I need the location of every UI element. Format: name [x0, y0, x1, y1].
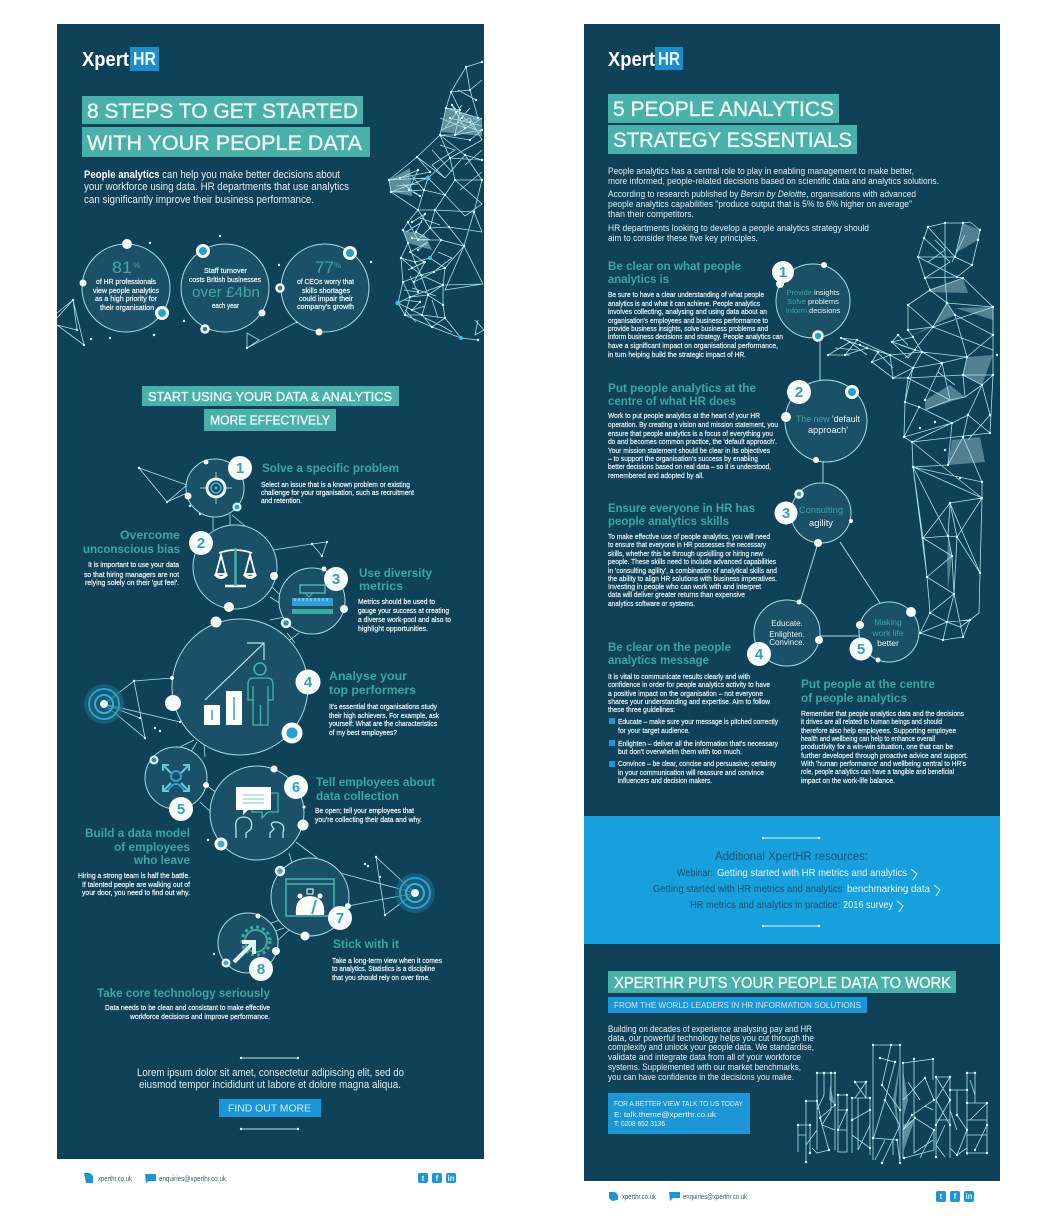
principle 1: Inform decisions: [786, 306, 841, 315]
logo: XpertHR left: Xpert: [82, 49, 129, 71]
section 2 text: remembered and adopted by all.: [608, 471, 704, 480]
section 1 text: in turn helping build the strategic impact of HR.: [608, 350, 746, 359]
principle 5: better: [877, 638, 899, 648]
section 4 text: but don't overwhelm them with too much.: [618, 747, 742, 756]
network: city skyline: [798, 1045, 987, 1163]
footer: left: in: [447, 1174, 455, 1183]
stat: over £4bn: costs British businesses: [189, 275, 261, 284]
panel: 8 steps: [57, 24, 484, 1159]
step 5: your door, you need to find out why.: [82, 888, 190, 897]
section 3 text: Ensure everyone in HR has: [608, 501, 755, 515]
principle 2: [781, 380, 867, 463]
contact box: E: talk.theme@xperthr.co.uk: [614, 1112, 717, 1119]
contact box: T: 0208 652 3136: [614, 1121, 665, 1128]
title: 8 steps: 8 STEPS TO GET STARTED: [87, 99, 358, 123]
heading: start using your data: MORE EFFECTIVELY: [210, 412, 330, 428]
logo: XpertHR right: HR: [658, 49, 680, 69]
step 2: [83, 525, 278, 612]
step 4: of my best employees?: [329, 728, 397, 737]
section 4 text: a positive impact on the organisation – not everyone: [608, 689, 763, 698]
stat: 77%: 77: [315, 258, 334, 277]
footer: right: f: [954, 1192, 957, 1201]
footer: left: t: [422, 1174, 425, 1183]
network: stats decoration: [57, 236, 371, 348]
section 1 text: organisation's employees and business performance to: [608, 316, 768, 325]
intro text: aim to consider these five key principles.: [608, 233, 758, 243]
stat: 81%: %: [133, 261, 140, 270]
footer: right: xperthr.co.uk: [622, 1194, 656, 1201]
icon: dashboard: [286, 879, 334, 916]
section 4 text: Enlighten – deliver all the information that's necessary: [618, 739, 778, 748]
contact box: FOR A BETTER VIEW TALK TO US TODAY: [614, 1099, 743, 1108]
icon: target left: [84, 684, 124, 724]
section 3 text: [608, 501, 777, 608]
step 4: Analyse your: [329, 669, 407, 683]
section 1 text: analytics is: [608, 272, 669, 286]
stat: 77%: company's growth: [297, 302, 354, 311]
section 2 text: [608, 381, 778, 480]
section 1 text: inform business decisions and strategy. People analytics can: [608, 332, 783, 341]
panel: additional resources: 2016 survey: [843, 899, 894, 911]
step 6: Be open; tell your employees that: [315, 806, 414, 815]
section 2 text: better decisions based on real data – so it is understood,: [608, 462, 771, 471]
step 5: If talented people are walking out of: [82, 880, 190, 889]
panel: additional resources: Additional XpertHR resources:: [715, 851, 868, 863]
footer: left: enquiries@xperthr.co.uk: [159, 1176, 226, 1183]
step 1: challenge for your organisation, such as recruitment: [261, 488, 414, 497]
principle 3: [774, 483, 853, 547]
logo: XpertHR left: HR: [133, 49, 156, 69]
footer: left: f: [436, 1174, 439, 1183]
section 3 text: the ability to align HR solutions with business imperatives.: [608, 574, 777, 583]
section 3 text: people. These skills need to include advanced capabilities: [608, 557, 776, 566]
stat: 81%: view people analytics: [93, 286, 159, 295]
icon: technology gear and arrow: [234, 927, 270, 962]
step 6: you're collecting their data and why.: [315, 815, 422, 824]
principle 2: The new 'default: [796, 414, 860, 425]
heading: start using your data: START USING YOUR DATA & ANALYTICS: [148, 389, 392, 404]
section 4 text: shares your understanding and expertise. Aim to follow: [608, 697, 771, 706]
section 1 text: [608, 259, 783, 359]
body: XpertHR: complexity and unlock your people data. We standardise,: [608, 1042, 814, 1052]
section 4 text: analytics message: [608, 653, 709, 667]
connector: principle links: [800, 342, 880, 636]
step 7: to analytics. Statistics is a discipline: [332, 964, 435, 973]
step 1: and retention.: [261, 496, 302, 505]
stat: 77%: could impair their: [299, 294, 354, 303]
step 3: Metrics should be used to: [358, 597, 435, 606]
step 3: metrics: [359, 579, 403, 593]
intro text: HR departments looking to develop a people analytics strategy should: [608, 223, 869, 233]
section 5 text: it drives are all related to human beings and should: [801, 717, 942, 726]
call to action: FIND OUT MORE: [228, 1102, 311, 1114]
section 1 text: have a significant impact on organisational performance,: [608, 341, 778, 350]
principle 5: work life: [871, 628, 904, 638]
section 2 text: do and becomes common practice, the 'default approach'.: [608, 437, 777, 446]
body: XpertHR: data, our powerful technology helps you cut through the: [608, 1033, 814, 1043]
step 2: Overcome: [120, 528, 180, 542]
section 1 text: analytics is and what it can achieve. People analytics: [608, 299, 760, 308]
section 1 text: Be sure to have a clear understanding of what people: [608, 290, 764, 299]
contact box: [608, 1093, 750, 1134]
stat: 81%: as a high priority for: [95, 294, 158, 303]
step 2: relying solely on their 'gut feel'.: [85, 578, 179, 587]
step 5: 5: [177, 801, 185, 818]
step 3: Use diversity: [359, 566, 432, 580]
step 4: [165, 616, 439, 755]
footer: left: xperthr.co.uk: [98, 1176, 132, 1183]
section 2 text: – to support the organisation's success by enabling: [608, 454, 758, 463]
step 4: their high achievers. For example, ask: [329, 711, 439, 720]
section 5 text: health and wellbeing can help to enhance overall: [801, 734, 935, 743]
section 3 text: to ensure that everyone in HR possesses the necessary: [608, 540, 766, 549]
step 1: 1: [236, 460, 244, 477]
icon: metrics: [292, 585, 333, 614]
stat: 81%: 81: [112, 258, 132, 277]
icon: data model: [163, 765, 189, 791]
principle 1: 1: [779, 264, 787, 281]
section 5 text: Put people at the centre: [801, 677, 935, 691]
step 8: Take core technology seriously: [97, 986, 270, 1000]
section 3 text: To make effective use of people analytics, you will need: [608, 532, 770, 541]
panel: additional resources: Webinar:: [677, 867, 713, 879]
step 2: so that hiring managers are not: [84, 570, 179, 579]
title: 8 steps: [82, 96, 370, 157]
section 4 text: these three guidelines:: [608, 705, 675, 714]
stat: 77%: %: [334, 261, 341, 270]
body: XpertHR: systems. Supplemented with our market benchmarks,: [608, 1062, 801, 1072]
principle 4: Enlighten.: [769, 630, 805, 639]
stat: over £4bn: Staff turnover: [204, 266, 248, 275]
step 1: [184, 456, 414, 517]
network: human figure: [828, 222, 997, 640]
principle 4: Convince.: [769, 638, 805, 647]
heading: XpertHR puts your people data to work: [608, 971, 956, 1013]
step 8: [97, 913, 280, 1021]
stat: 81%: their organisation: [100, 303, 154, 312]
footer: right: in: [965, 1192, 973, 1201]
intro text: than their competitors.: [608, 209, 694, 219]
section 4 text: Be clear on the people: [608, 640, 731, 654]
section 5 text: therefore also help employees. Supporting employee: [801, 726, 956, 735]
section 5 text: [801, 677, 968, 785]
icon: conversation: [236, 787, 284, 838]
step 3: a diverse work-pool and also to: [358, 615, 451, 624]
principle 5: [850, 602, 919, 662]
intro text: According to research published by Bersin by Deloitte, organisations with advanced: [608, 189, 916, 199]
section 4 text: confidence in order for people analytics activity to have: [608, 680, 770, 689]
section 3 text: data will deliver greater returns than expensive: [608, 590, 745, 599]
stat: over £4bn: over £4bn: [192, 284, 260, 301]
section 4 text: [608, 640, 778, 785]
step 2: 2: [197, 535, 205, 552]
footer: right: enquiries@xperthr.co.uk: [683, 1194, 747, 1201]
section 3 text: analytics software or systems.: [608, 599, 695, 608]
intro text: People analytics has a central role to play in enabling management to make better,: [608, 166, 914, 176]
step 3: 3: [332, 571, 340, 588]
heading: XpertHR puts your people data to work: FROM THE WORLD LEADERS IN HR INFORMATION SOLUTIONS: [614, 1000, 861, 1010]
stat: 81%: of HR professionals: [96, 277, 156, 286]
step 3: gauge your success at creating: [358, 606, 449, 615]
step 4: yourself: What are the characteristics: [329, 719, 437, 728]
call to action: [137, 1058, 404, 1129]
section 5 text: further developed through proactive advice and support.: [801, 751, 968, 760]
section 4 text: Convince – be clear, concise and persuasive; certainty: [618, 759, 776, 768]
panel: additional resources: Getting started with HR metrics and analytics: [717, 867, 907, 879]
stat: over £4bn: each year: [212, 301, 240, 310]
principle 3: Consulting: [799, 505, 843, 516]
call to action: Lorem ipsum dolor sit amet, consectetur adipiscing elit, sed do: [137, 1067, 404, 1079]
body: XpertHR: you can have confidence in the decisions you make.: [608, 1072, 794, 1082]
heading: start using your data: [142, 386, 399, 431]
principle 2: approach': [808, 425, 848, 436]
step 8: Data needs to be clean and consistant to make effective: [105, 1003, 270, 1012]
panel: additional resources: [584, 816, 1000, 944]
icon: scales: [215, 548, 256, 586]
principle 3: agility: [809, 518, 833, 529]
icon: performance chart: [204, 643, 273, 725]
section 5 text: productivity for a win-win situation, one that can be: [801, 742, 953, 751]
principle 2: 2: [795, 384, 803, 401]
intro text: people analytics capabilities "produce output that is 5% to 6% higher on average": [608, 199, 912, 209]
call to action: eiusmod tempor incididunt ut labore et dolore magna aliqua.: [139, 1079, 401, 1091]
step 7: that you should rely on over time.: [332, 973, 430, 982]
section 1 text: involves collecting, analysing and using data about an: [608, 307, 767, 316]
intro text: your workforce using data. HR departments that use analytics: [84, 181, 349, 193]
body: XpertHR: Building on decades of experience analysing pay and HR: [608, 1024, 812, 1034]
intro text: can significantly improve their business performance.: [84, 194, 314, 206]
panel: additional resources: HR metrics and analytics in practice:: [690, 899, 840, 911]
footer: right: [609, 1191, 974, 1202]
panel: additional resources: Getting started with HR metrics and analytics:: [653, 883, 845, 895]
panel: 5 essentials: [584, 24, 1000, 1181]
intro text: People analytics can help you make better decisions about: [84, 169, 340, 181]
section 4 text: It is vital to communicate results clearly and with: [608, 672, 750, 681]
step 6: data collection: [316, 789, 399, 803]
logo: XpertHR right: [608, 47, 683, 71]
footer: left: [84, 1173, 456, 1183]
panel: additional resources: benchmarking data: [847, 883, 930, 895]
stat: over £4bn: [181, 244, 269, 332]
section 2 text: centre of what HR does: [608, 394, 736, 408]
title: 5 essentials: 5 PEOPLE ANALYTICS: [613, 97, 834, 121]
intro text: [84, 169, 349, 206]
logo: XpertHR right: Xpert: [608, 49, 655, 71]
logo: XpertHR left: [82, 47, 159, 71]
title: 8 steps: WITH YOUR PEOPLE DATA: [87, 131, 363, 155]
step 1: Select an issue that is a known problem or existing: [261, 480, 410, 489]
section 4 text: for your target audience.: [618, 726, 690, 735]
step 1: Solve a specific problem: [262, 461, 399, 475]
section 4 text: Educate – make sure your message is pitched correctly: [618, 717, 778, 726]
step 4: It's essential that organisations study: [329, 702, 437, 711]
principle 4: Educate.: [771, 619, 803, 628]
step 5: of employees: [114, 840, 190, 854]
principle 3: 3: [782, 505, 790, 522]
stat: 77%: skills shortages: [302, 286, 350, 295]
icon: target right: [395, 873, 435, 913]
stat: 77%: [276, 244, 369, 336]
title: 5 essentials: STRATEGY ESSENTIALS: [613, 128, 852, 152]
body: XpertHR: [608, 1024, 814, 1082]
step 5: [78, 747, 209, 897]
heading: XpertHR puts your people data to work: XPERTHR PUTS YOUR PEOPLE DATA TO WORK: [614, 975, 951, 992]
step 4: 4: [304, 674, 313, 691]
stat: 81%: [80, 239, 170, 332]
principle 1: [772, 261, 850, 340]
section 4 text: influencers and decision makers.: [618, 776, 712, 785]
intro text: more informed, people-related decisions based on scientific data and analytics solutions.: [608, 176, 939, 186]
step 5: Hiring a strong team is half the battle.: [78, 871, 190, 880]
principle 5: Making: [874, 617, 902, 627]
principle 4: [747, 600, 823, 666]
section 5 text: Remember that people analytics data and the decisions: [801, 709, 964, 718]
step 7: [271, 858, 442, 982]
title: 5 essentials: [608, 94, 857, 154]
network: face: [389, 62, 484, 340]
footer: right: t: [940, 1192, 943, 1201]
step 7: Stick with it: [333, 937, 399, 951]
section 1 text: Be clear on what people: [608, 259, 741, 273]
step 6: 6: [292, 779, 300, 796]
principle 4: 4: [755, 646, 764, 663]
section 4 text: in your communication will reassure and convince: [618, 768, 764, 777]
step 6: [210, 766, 435, 860]
section 2 text: Put people analytics at the: [608, 381, 756, 395]
network: step connectors: [104, 468, 415, 954]
section 3 text: skills, whether this be through upskilling or hiring new: [608, 549, 764, 558]
principle 1: Solve problems: [787, 297, 839, 306]
section 3 text: people analytics skills: [608, 514, 729, 528]
intro text: [608, 166, 939, 243]
step 7: Take a long-term view when it comes: [332, 956, 442, 965]
principle 5: 5: [857, 641, 865, 658]
section 5 text: of people analytics: [801, 691, 907, 705]
section 5 text: impact on the work-life balance.: [801, 776, 895, 785]
section 5 text: With 'human performance' and wellbeing central to HR's: [801, 759, 966, 768]
section 2 text: Work to put people analytics at the heart of your HR: [608, 411, 760, 420]
principle 1: Provide insights: [787, 288, 840, 297]
step 8: workforce decisions and improve performance.: [129, 1012, 270, 1021]
step 6: Tell employees about: [316, 775, 435, 789]
section 5 text: role, people analytics can have a tangible and beneficial: [801, 767, 954, 776]
step 4: top performers: [329, 683, 416, 697]
step 5: who leave: [133, 853, 190, 867]
body: XpertHR: validate and integrate data from all of your workforce: [608, 1052, 801, 1062]
step 3: highlight opportunities.: [358, 624, 428, 633]
section 3 text: Investing in people who can work with and interpret: [608, 582, 761, 591]
step 2: It is important to use your data: [88, 560, 179, 569]
section 3 text: in 'consulting agility', a combination of analytical skills and: [608, 566, 777, 575]
section 1 text: provide business insights, solve business problems and: [608, 324, 768, 333]
step 2: unconscious bias: [83, 542, 180, 556]
step 3: [279, 566, 451, 634]
step 5: Build a data model: [85, 826, 190, 840]
section 2 text: ensure that people analytics is a focus of everything you: [608, 429, 773, 438]
step 8: 8: [257, 961, 265, 978]
section 2 text: operation. By creating a vision and mission statement, you: [608, 420, 778, 429]
section 2 text: Your mission statement should be clear in its objectives: [608, 446, 770, 455]
stat: 77%: of CEOs worry that: [297, 277, 354, 286]
step 7: 7: [336, 910, 344, 927]
